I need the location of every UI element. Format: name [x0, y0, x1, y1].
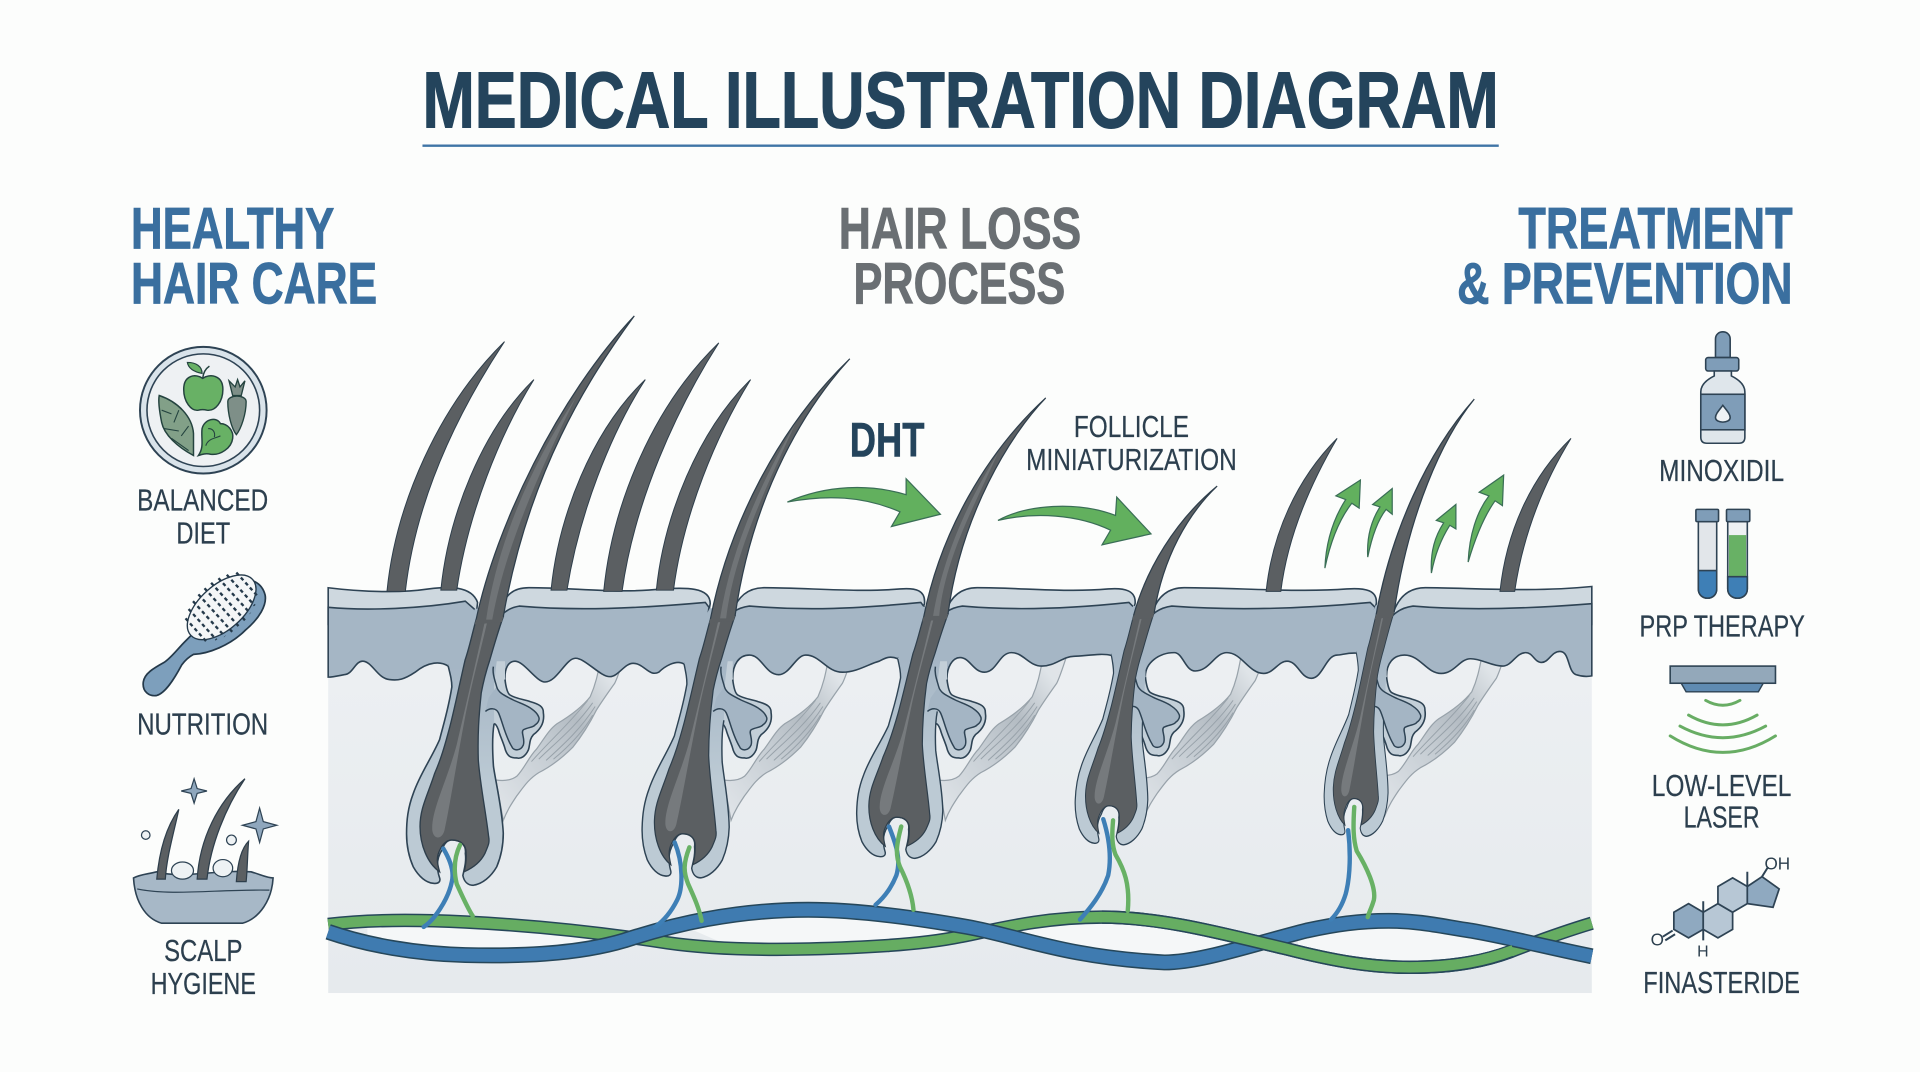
- icon: hair brush: [143, 563, 267, 696]
- heading: hair loss process: HAIR LOSS: [839, 197, 1081, 262]
- follicle hair 3: [868, 398, 1046, 846]
- label: PRP therapy: PRP THERAPY: [1640, 610, 1805, 644]
- arrow: DHT to miniaturization: [787, 479, 940, 527]
- blood vessels: [328, 910, 1592, 967]
- apple: [184, 362, 223, 410]
- heading: treatment and prevention: [1457, 197, 1793, 317]
- icon: finasteride molecule: [1651, 853, 1790, 960]
- label: follicle miniaturization: [1026, 410, 1237, 477]
- label: follicle miniaturization: FOLLICLE: [1074, 410, 1189, 444]
- label: scalp hygiene: SCALP: [164, 934, 242, 968]
- label: scalp hygiene: [151, 934, 256, 1001]
- heading: healthy hair care: [131, 197, 377, 317]
- icon: low-level laser: [1670, 666, 1775, 752]
- follicle hair 2: [653, 359, 850, 865]
- green vein overlap: [1102, 917, 1511, 967]
- icon: finasteride molecule: O: [1651, 929, 1664, 949]
- label: balanced diet: DIET: [176, 517, 230, 551]
- leaf: [159, 395, 193, 455]
- icon: scalp hygiene: [134, 779, 277, 923]
- icon: balanced diet plate: [140, 347, 267, 473]
- arrow: miniaturization progress: [998, 497, 1151, 545]
- broccoli: [198, 419, 233, 455]
- blue artery: [328, 910, 1592, 962]
- follicle hair 5: [1332, 399, 1474, 825]
- follicle hair 1: [420, 316, 634, 872]
- capillaries into follicles: [424, 807, 1374, 927]
- label: balanced diet: BALANCED: [137, 484, 268, 518]
- heading: healthy hair care: HAIR CARE: [131, 252, 377, 317]
- label: low-level laser: LOW-LEVEL: [1652, 769, 1791, 803]
- label: balanced diet: [137, 484, 268, 551]
- heading: hair loss process: [839, 197, 1081, 317]
- arrows: regrowth: [1325, 475, 1504, 573]
- icon: minoxidil bottle: [1701, 332, 1745, 443]
- label: low-level laser: [1652, 769, 1791, 835]
- carrot: [228, 380, 246, 435]
- heading: healthy hair care: HEALTHY: [131, 197, 334, 262]
- skin surface layers: [328, 587, 1592, 682]
- label: finasteride: FINASTERIDE: [1643, 966, 1800, 1000]
- heading: hair loss process: PROCESS: [853, 252, 1065, 317]
- green vein: [328, 917, 1592, 967]
- dermis background: [328, 612, 1592, 993]
- hair shaft: small hairs: [387, 342, 1571, 591]
- label: scalp hygiene: HYGIENE: [151, 967, 256, 1001]
- sebaceous gland ducts: [487, 659, 1425, 758]
- follicle hair 4: [1084, 486, 1217, 833]
- label: follicle miniaturization: MINIATURIZATION: [1026, 443, 1237, 477]
- heading: treatment and prevention: TREATMENT: [1518, 197, 1793, 262]
- title: MEDICAL ILLUSTRATION DIAGRAM: [422, 55, 1499, 144]
- sebaceous gland lobes: [485, 664, 1421, 750]
- label: minoxidil: MINOXIDIL: [1659, 454, 1784, 488]
- heading: treatment and prevention: & PREVENTION: [1457, 252, 1793, 317]
- label: DHT: DHT: [850, 415, 924, 468]
- vessel gaps: [367, 914, 1512, 962]
- icon: PRP tubes: [1696, 509, 1750, 598]
- icon: finasteride molecule: OH: [1764, 853, 1790, 873]
- follicle sheaths: [407, 605, 1394, 885]
- arrector pili muscles: [496, 644, 1509, 820]
- panel: scalp cross-section: [328, 316, 1592, 993]
- icon: finasteride molecule: H: [1697, 943, 1709, 960]
- label: low-level laser: LASER: [1684, 801, 1760, 835]
- label: nutrition: NUTRITION: [137, 708, 268, 742]
